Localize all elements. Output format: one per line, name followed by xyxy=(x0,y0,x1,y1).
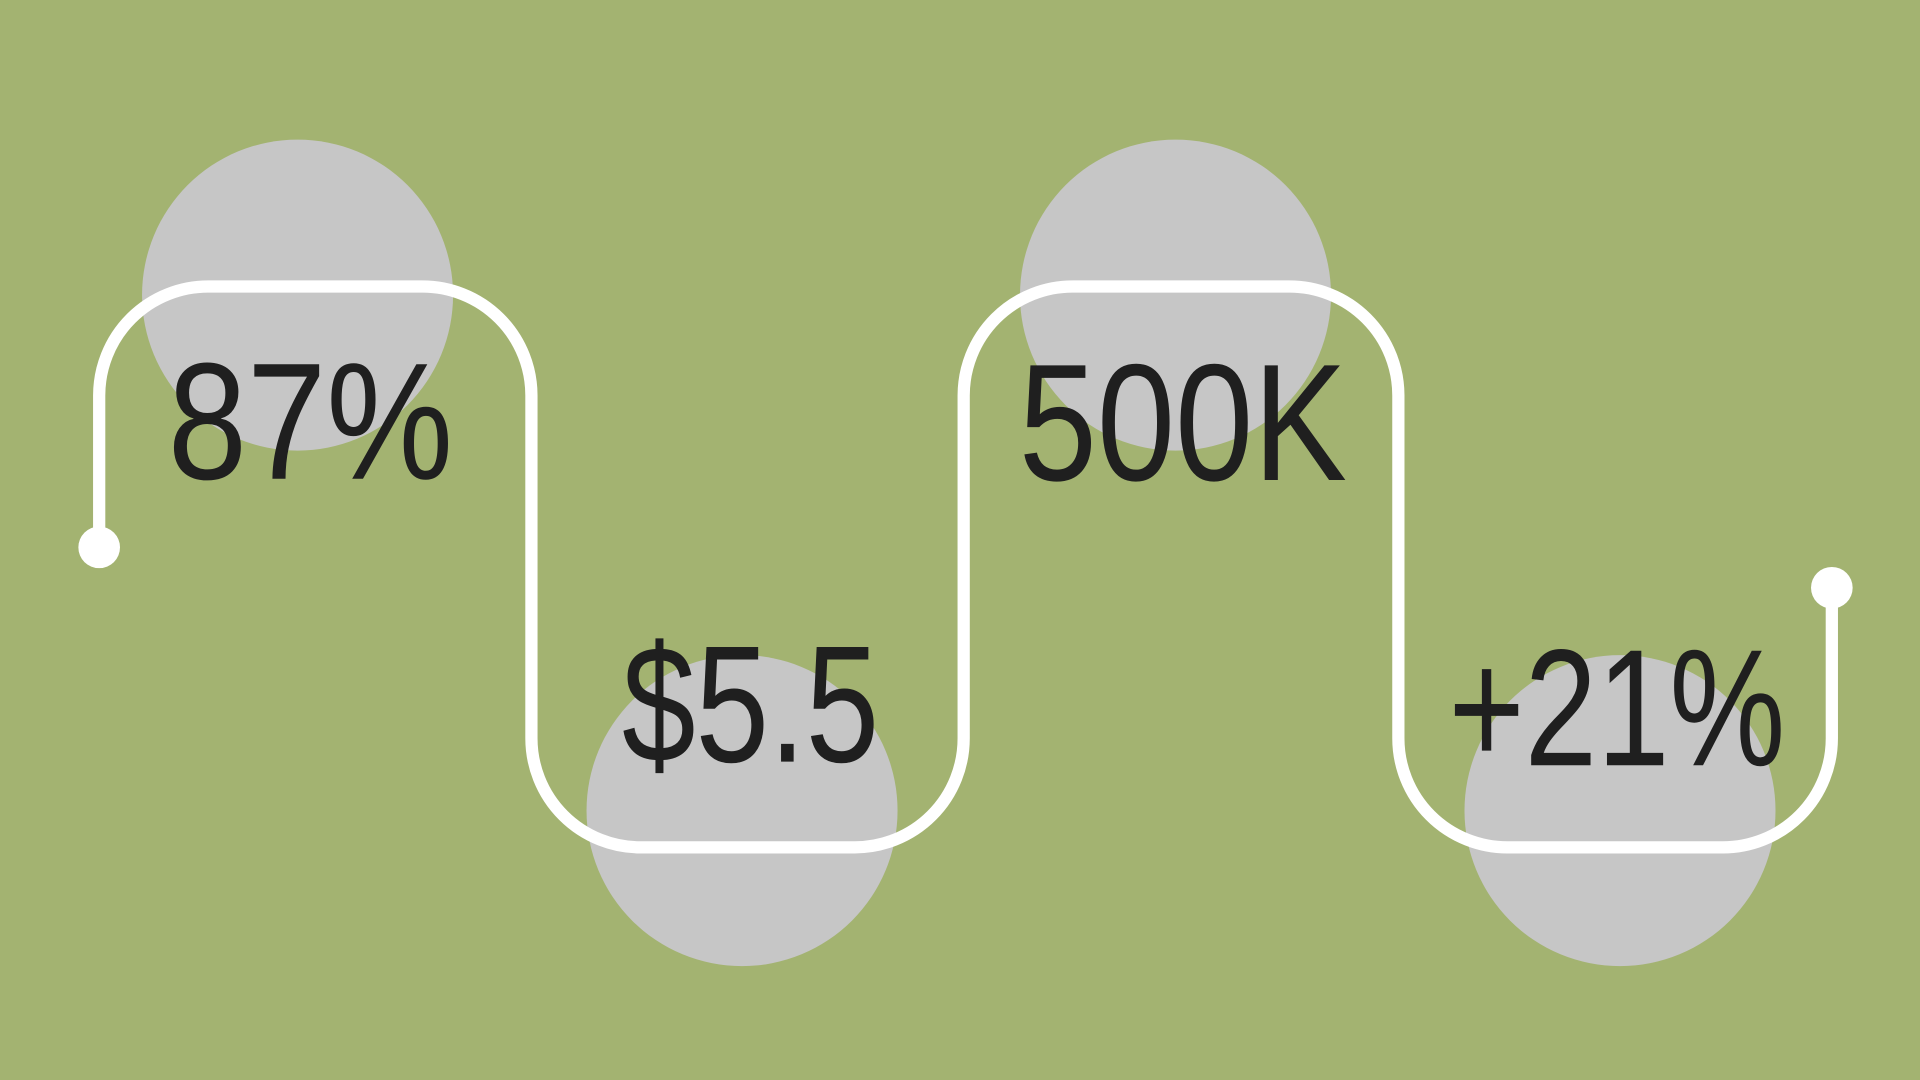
circle: stat 4 backdrop xyxy=(1464,655,1776,966)
wave connector line xyxy=(99,287,1832,847)
stat: $5.5: $5.5 xyxy=(622,612,879,798)
end dot xyxy=(1811,567,1853,609)
circle: stat 2 backdrop xyxy=(587,655,898,966)
circle: stat 3 backdrop xyxy=(1020,140,1331,451)
stat: 87%: 87% xyxy=(168,329,453,515)
start dot xyxy=(78,527,120,568)
stat: +21%: +21% xyxy=(1449,615,1785,801)
circle: stat 1 backdrop xyxy=(142,140,453,451)
stat: 500K: 500K xyxy=(1019,330,1347,516)
